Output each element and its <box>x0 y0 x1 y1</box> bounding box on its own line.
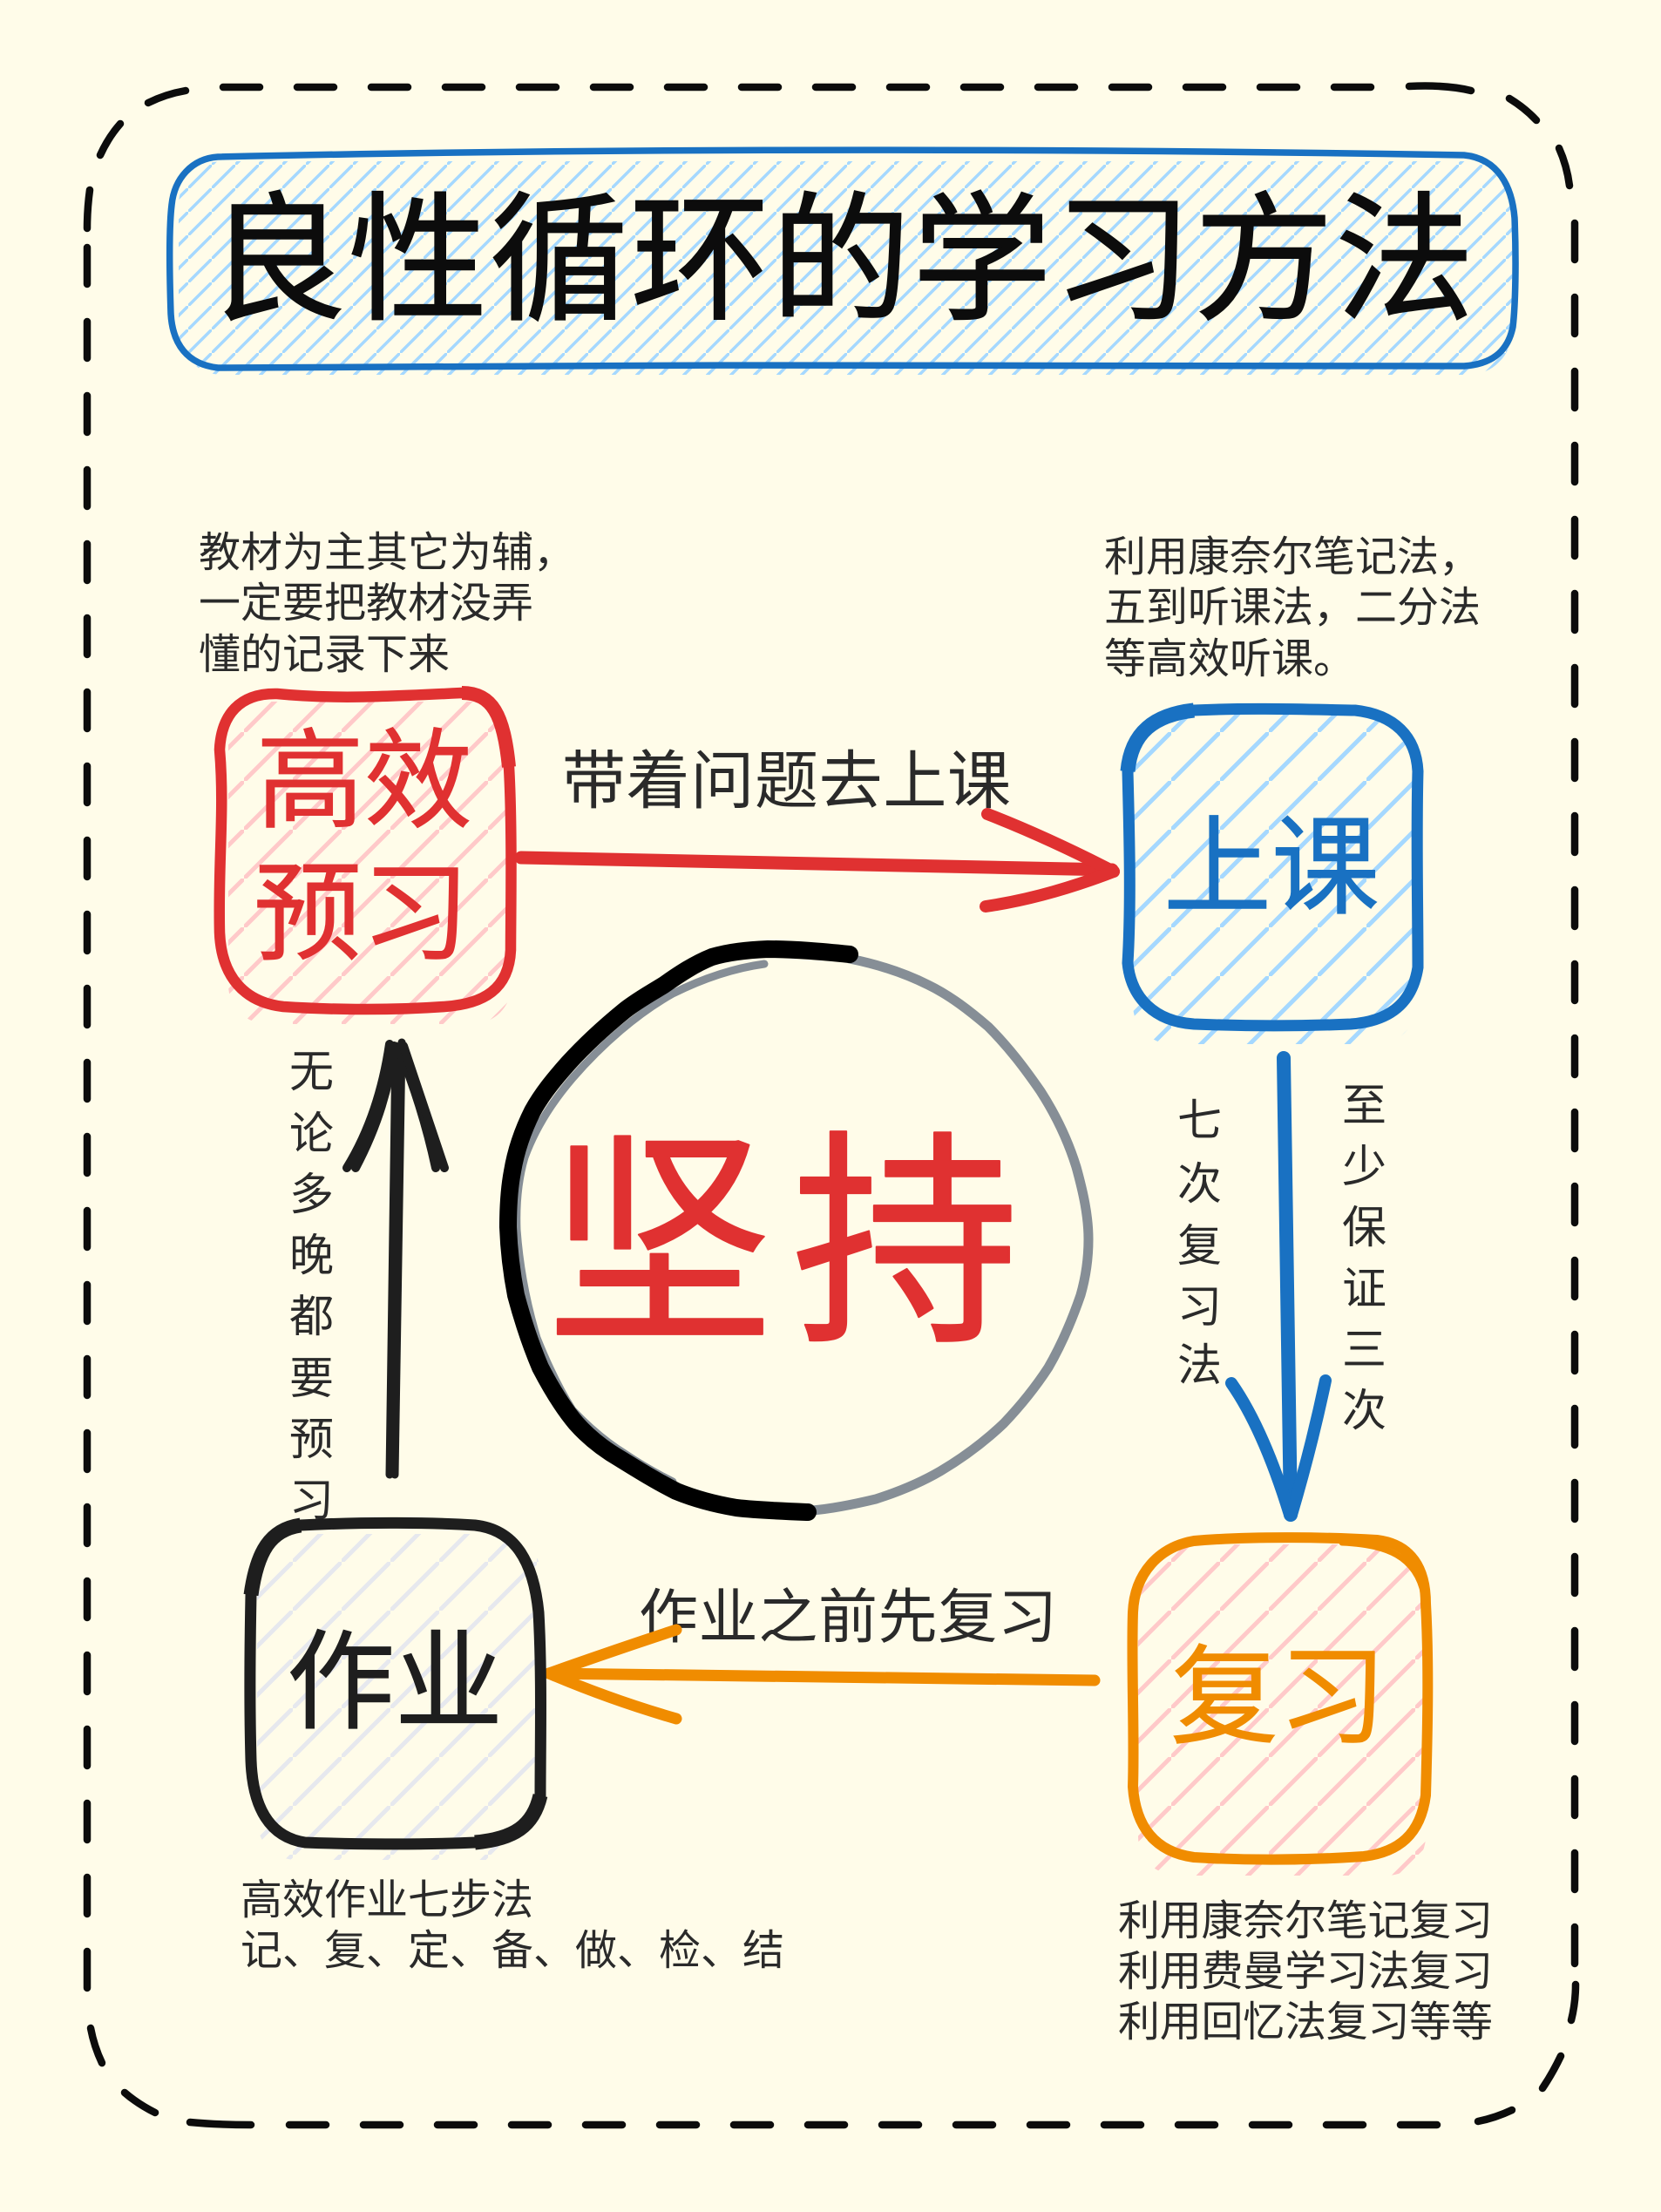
复习 annotation line 3: 利用回忆法复习等等 <box>1118 1999 1493 2046</box>
label: 七次复习法: 七次复习法 <box>1177 1096 1222 1390</box>
panel: 复习: 复习 <box>1170 1638 1386 1758</box>
arrow: 作业 to 预习 <box>347 1042 444 1475</box>
panel: 高效预习: 预习 <box>254 854 470 974</box>
panel: 上课 <box>1128 709 1418 1044</box>
panel: 作业: 作业 <box>287 1623 503 1743</box>
title text: 良性循环的学习方法 <box>207 182 1475 338</box>
panel: 作业 annotation: 高效作业七步法 <box>241 1877 533 1924</box>
label: 无论多晚都要预习: 无论多晚都要预习 <box>289 1047 334 1525</box>
arrow label: 作业之前先复习: 作业之前先复习 <box>639 1584 1057 1651</box>
label: 至少保证三次: 至少保证三次 <box>1342 1081 1386 1435</box>
circle: 坚持 <box>508 949 1088 1512</box>
circle text: 坚持 <box>546 1116 1020 1372</box>
panel: 复习 <box>1132 1537 1427 1876</box>
panel: 复习 annotation: 利用康奈尔笔记复习 <box>1118 1898 1493 1944</box>
panel: 上课: 上课 <box>1163 808 1380 928</box>
panel: 作业 annotation: 记、复、定、备、做、检、结 <box>241 1928 784 1974</box>
panel: 高效预习 annotation: 一定要把教材没弄 <box>199 580 533 627</box>
复习 annotation line 2: 利用费曼学习法复习 <box>1118 1949 1493 1995</box>
arrow: 复习 to 作业 <box>549 1630 1095 1719</box>
panel: 上课 annotation: 五到听课法，二分法 <box>1104 585 1481 631</box>
arrow label: 带着问题去上课: 带着问题去上课 <box>562 746 1011 817</box>
panel: 高效预习 annotation: 懂的记录下来 <box>199 632 450 678</box>
panel: 高效预习 <box>220 693 512 1024</box>
panel: 上课 annotation: 等高效听课。 <box>1104 636 1355 682</box>
arrow: 上课 to 复习 <box>1231 1058 1325 1515</box>
panel: 高效预习: 高效 <box>256 722 472 842</box>
panel: 作业 <box>250 1523 540 1860</box>
title banner <box>170 150 1515 375</box>
panel: 上课 annotation: 利用康奈尔笔记法， <box>1104 534 1481 580</box>
arrow: 预习 to 上课 <box>521 814 1114 906</box>
panel: 高效预习 annotation: 教材为主其它为辅， <box>199 530 575 576</box>
